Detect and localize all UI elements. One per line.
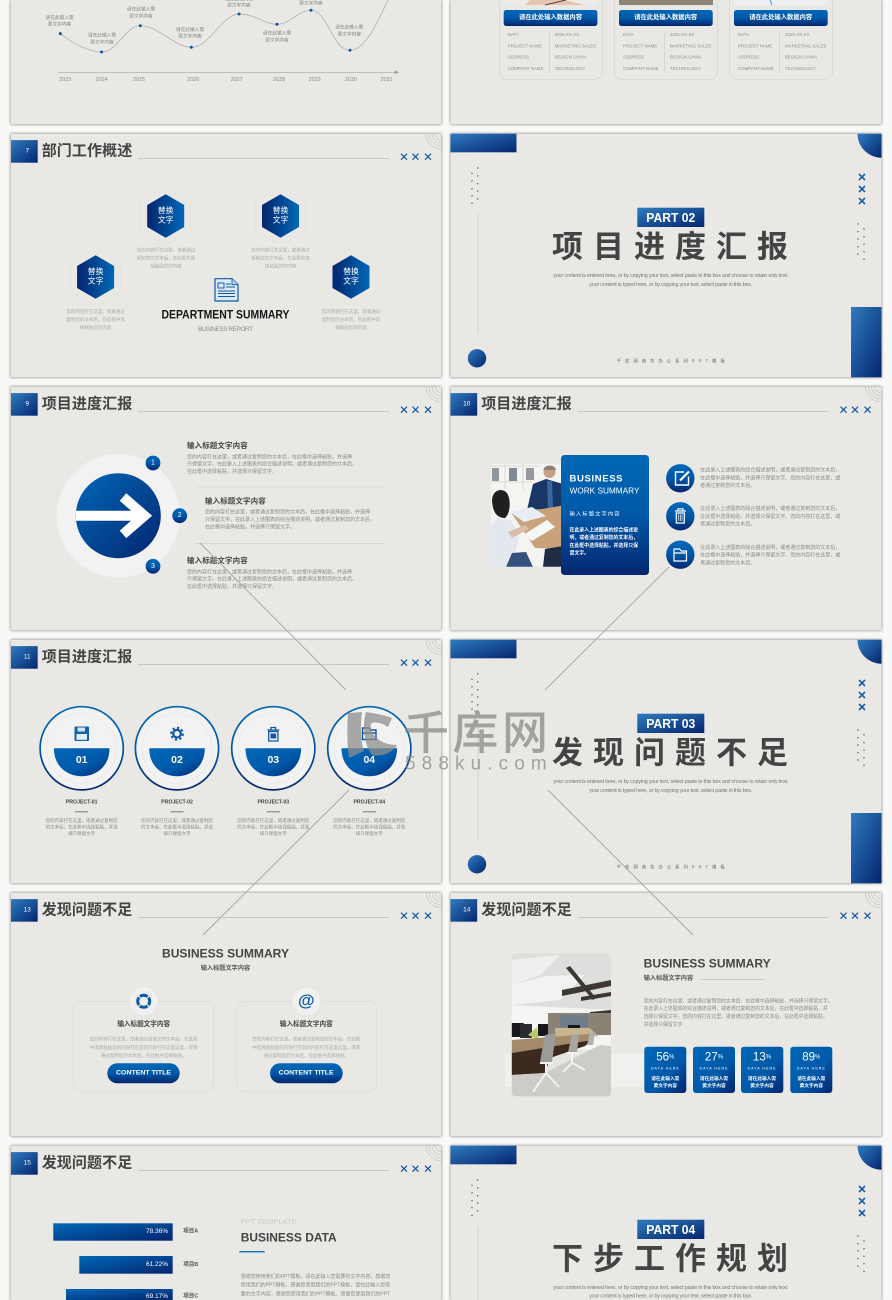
panel: slide 11 four projects <box>11 640 441 883</box>
card right: 您的内容打在这里。或者通过复制您的文本后。在此框 <box>252 1036 361 1042</box>
hexagon 1 text <box>137 246 196 270</box>
section description <box>553 1285 788 1299</box>
chart labels: 请在此输入需 <box>263 30 291 36</box>
text: item 3: 在此框中选择粘贴，并选择只保留文字。您的内容打在这里，或 <box>700 552 840 559</box>
hexagon 3 text <box>66 308 125 331</box>
hexagon 4: 文字 <box>343 276 359 286</box>
stat tile 56% <box>644 1047 686 1093</box>
heading <box>644 956 771 982</box>
axis years: 2031 <box>380 77 392 83</box>
card 2: TECHNOLOGY <box>670 66 701 71</box>
icon: trash <box>666 502 694 530</box>
part label: PART 04 <box>646 1222 696 1237</box>
hexagon 4 <box>326 248 376 306</box>
card 2: COMPANY NAME <box>623 66 659 71</box>
bar chart: 61.22% <box>146 1261 168 1268</box>
stat tile 89%: 要文字内容 <box>800 1082 823 1089</box>
text block 1: 输入标题文字内容 <box>187 440 248 450</box>
blue text panel: 在此框中选择粘贴，并选择只保 <box>570 542 638 549</box>
axis years: 2028 <box>273 77 285 83</box>
body text: 选择只保留文字。您的内容打在这里，或者通过复制您的文本后，在此框中选择粘贴， <box>644 1013 828 1020</box>
slide header: 7 <box>25 148 29 155</box>
decorative shapes <box>450 1146 882 1300</box>
heading: BUSINESS SUMMARY <box>162 946 289 960</box>
blue text panel: WORK SUMMARY <box>570 486 640 496</box>
body text: 要的文字内容，感谢您使用我们的PPT模板。感谢您使用我们的PPT <box>241 1291 390 1298</box>
slide header <box>11 893 441 922</box>
axis years: 2027 <box>231 77 243 83</box>
line chart curve <box>60 0 388 52</box>
body text <box>241 1273 390 1298</box>
stat tile 13%: 要文字内容 <box>750 1082 774 1089</box>
panel: slide 6 data cards <box>450 0 882 124</box>
badges <box>146 456 187 574</box>
hexagon 2 <box>256 187 306 245</box>
section description: your content is typed here, or by copying your text, select paste in this box. <box>589 282 752 288</box>
stat tile 56%: 请在此输入需 <box>651 1075 680 1082</box>
hexagon 3 <box>71 248 121 306</box>
panel: slide 7 department overview <box>11 134 441 377</box>
card 3: 请在此处输入数据内容 <box>749 12 813 21</box>
decorative shapes <box>450 640 882 883</box>
card left: CONTENT TITLE <box>116 1070 171 1076</box>
text block 3 <box>187 555 357 590</box>
slide header <box>11 1146 441 1175</box>
stat tile 56%: 56% <box>656 1051 675 1063</box>
heading: business data: BUSINESS DATA <box>241 1230 337 1244</box>
card right: @ <box>298 991 315 1010</box>
text: item 2: 在此录入上述图表的综合描述说明，或者通过复制您的文本后， <box>700 505 840 512</box>
text: item 1: 在此录入上述图表的综合描述说明，或者通过复制您的文本后， <box>700 467 840 474</box>
slide header <box>11 134 441 163</box>
panel: slide 12 section PART 03 <box>450 640 882 883</box>
stat tile 89%: 请在此输入需 <box>797 1075 826 1082</box>
card right: 通过复制您的文本后，在此框中选择粘贴。 <box>264 1052 349 1059</box>
stat tile 13%: DATA HERE <box>747 1067 777 1071</box>
photo: meeting <box>491 464 563 567</box>
blue text panel <box>561 455 649 575</box>
project 04: 04 <box>363 754 375 766</box>
card 2: PROJECT NAME <box>623 44 657 48</box>
project 01: 的文本后，在此框中选择粘贴，并选 <box>46 824 118 830</box>
slide header: 发现问题不足 <box>42 1153 132 1171</box>
axis years <box>59 77 392 83</box>
panel: slide 10 business work summary <box>450 387 882 630</box>
slide header: 13 <box>24 907 31 914</box>
axis years: 2023 <box>59 77 71 83</box>
project 04: 择只保留文字 <box>356 830 383 837</box>
text: item 2: 者通过复制您的文本后。 <box>700 521 755 528</box>
text: item 3: 在此录入上述图表的综合描述说明，或者通过复制您的文本后， <box>700 544 840 551</box>
text block 3: 您的内容打在这里，或者通过复制您的文本后，在此框中选择粘贴，并选择 <box>187 568 352 575</box>
project 01 <box>40 707 123 837</box>
card 1: BEIJIGN CHINA <box>555 54 587 60</box>
project 03: 03 <box>267 754 279 766</box>
project 02: 择只保留文字 <box>164 830 191 837</box>
card 2 <box>614 0 718 79</box>
card right: CONTENT TITLE <box>279 1070 334 1076</box>
section description <box>553 273 788 288</box>
hexagon 2 text <box>251 246 310 270</box>
card 3: 2025-XX-XX <box>785 32 809 37</box>
section description: your content is entered here, or by copying your text, select paste in this box and choose to retain only text. <box>553 1285 788 1291</box>
stat tile 56%: DATA HERE <box>651 1067 680 1071</box>
watermark: diagonal lines and logo: 千库网 <box>403 707 552 759</box>
chart labels: 请在此输入需 <box>88 32 116 38</box>
project 03: 的文本后，在此框中选择粘贴，并选 <box>237 824 310 830</box>
chart labels: 要文字内容 <box>338 30 361 38</box>
slide header: 9 <box>25 401 29 408</box>
decorative shapes <box>450 134 882 377</box>
chart labels: 要文字内容 <box>299 0 323 6</box>
text block 1: 您的内容打在这里，或者通过复制您的文本后，在此框中选择粘贴，并选择 <box>187 453 352 460</box>
bar chart: 项目B <box>183 1261 198 1268</box>
card 2: ADDRESS <box>623 54 644 60</box>
blue text panel: 留文字。 <box>570 550 589 556</box>
card left: 您的内容打在这里。或者通过复制您的文本后。在此框 <box>90 1036 198 1042</box>
text: PPT template: PPT TEMPLATE <box>241 1217 297 1226</box>
chart labels: 请在此输入需 <box>127 6 155 12</box>
panel: slide 5 timeline <box>11 0 441 124</box>
footer caption: 千库网商务办公系列PPT模板 <box>617 358 726 364</box>
project 03: 择只保留文字 <box>260 830 287 837</box>
body text: 您的内容打在这里，或者通过复制您的文本后，在此框中选择粘贴，并选择只保留文字。 <box>644 998 833 1004</box>
hexagon 4 text <box>322 308 381 331</box>
hexagon 3 text: 您的内容打在这里，或者通过 <box>66 308 125 315</box>
card 1: PROJECT NAME <box>508 44 542 48</box>
blue text panel: 在此录入上述图表的综合描述说 <box>570 526 638 534</box>
project 02 <box>135 707 219 837</box>
card left: 输入标题文字内容 <box>117 1019 170 1028</box>
card 1: 请在此处输入数据内容 <box>519 12 583 21</box>
slide header: 项目进度汇报 <box>42 395 132 413</box>
project 04: 的文本后，在此框中选择粘贴，并选 <box>333 824 406 830</box>
text block 2: 您的内容打在这里，或者通过复制您的文本后，在此框中选择粘贴，并选择 <box>205 509 370 516</box>
chart labels: 要文字内容 <box>227 2 251 8</box>
card 1: 2025-XX-XX <box>555 32 579 37</box>
card 1 <box>499 0 603 79</box>
hexagon 3: 替换 <box>88 266 104 276</box>
card left: 通过复制您的文本后，在此框中选择粘贴。 <box>101 1052 186 1059</box>
stat tile 89%: DATA HERE <box>797 1067 826 1071</box>
chart labels: 要文字内容 <box>48 20 72 28</box>
hexagon 2: 文字 <box>273 215 288 225</box>
card right <box>237 987 377 1091</box>
watermark: diagonal lines and logo <box>200 543 693 935</box>
card 3: TECHNOLOGY <box>785 66 816 71</box>
section title: 下步工作规划 <box>552 1241 798 1276</box>
hexagon 4 text: 择粘贴您的内容 <box>335 324 367 331</box>
project 01: PROJECT-01 <box>66 800 98 806</box>
chart labels: 要文字内容 <box>265 36 289 44</box>
hexagon 1 text: 复制您的文本后，在此框中选 <box>137 254 196 262</box>
slide header <box>450 893 880 922</box>
hexagon 2 text: 您的内容打在这里，或者通过 <box>251 246 310 254</box>
blue text panel: BUSINESS <box>570 474 622 484</box>
slide header: 发现问题不足 <box>42 901 132 919</box>
card left: 中选择粘贴您的内容打在您的内容打在这里这里。或者 <box>90 1044 198 1051</box>
light band <box>505 1054 745 1087</box>
axis years: 2026 <box>187 77 199 83</box>
card 2: DATA <box>623 32 634 37</box>
project 03 <box>232 707 315 837</box>
text block 1 <box>187 440 357 475</box>
slide header: 项目进度汇报 <box>42 648 132 666</box>
panel: slide 14 summary with stats <box>450 893 882 1136</box>
card 3: BEIJIGN CHINA <box>785 54 817 60</box>
card 3: COMPANY NAME <box>738 66 774 71</box>
slide header: 15 <box>24 1160 31 1167</box>
bar chart: 项目A <box>183 1227 198 1234</box>
card 2: 请在此处输入数据内容 <box>634 12 698 21</box>
chart labels: 请在此输入需 <box>335 24 364 30</box>
text block 2: 输入标题文字内容 <box>205 496 266 506</box>
card 3: PROJECT NAME <box>738 44 772 48</box>
hexagon 1 text: 您的内容打在这里，或者通过 <box>137 246 196 254</box>
stat tile 27%: DATA HERE <box>699 1067 729 1071</box>
watermark: diagonal lines and logo: 588ku.com <box>405 754 553 774</box>
card right: 中选择粘贴您的内容打在您的内容打在这里这里。或者 <box>252 1044 361 1051</box>
hexagon 4 text: 您的内容打在这里，或者通过 <box>322 308 381 315</box>
text block 3: 只保留文字。在此录入上述图表的综合描述说明，或者通过复制您的文本后， <box>187 576 357 583</box>
text block 2 <box>205 496 375 531</box>
part label: PART 03 <box>646 716 695 731</box>
stat tile 89% <box>790 1047 832 1093</box>
badges: 2 <box>178 512 182 519</box>
card 3: DATA <box>738 32 749 37</box>
hexagon 4: 替换 <box>343 266 359 276</box>
slide header <box>450 387 880 416</box>
project 01: 择只保留文字 <box>68 830 96 837</box>
hexagon 1 text: 择粘贴您的内容 <box>150 262 182 270</box>
project 03: 您的内容打在这里，或者通过复制您 <box>237 817 310 824</box>
card 1: MARKETING SALES <box>555 44 596 48</box>
body text: 在此录入上述图表的综合描述说明，或者通过复制您的文本后，在此框中选择粘贴，并 <box>644 1005 828 1012</box>
part label <box>637 1220 704 1239</box>
panel: slide 8 section PART 02 <box>450 134 882 377</box>
panel: slide 16 section PART 04 <box>450 1146 882 1300</box>
stat tile 13% <box>741 1047 783 1093</box>
bar chart <box>53 1223 198 1300</box>
card 3 <box>729 0 833 79</box>
stat tile 27%: 请在此输入需 <box>700 1075 728 1082</box>
stat tile 27%: 要文字内容 <box>702 1082 726 1089</box>
stat tile 27%: 27% <box>705 1051 724 1063</box>
card right: 输入标题文字内容 <box>280 1019 333 1028</box>
hexagon 3: 文字 <box>88 276 104 286</box>
project 02: PROJECT-02 <box>161 800 193 806</box>
section description <box>553 779 788 794</box>
section description: your content is typed here, or by copying your text, select paste in this box. <box>589 1293 752 1299</box>
chart labels: 要文字内容 <box>90 38 114 46</box>
hexagon 1 <box>141 187 191 245</box>
text block 3: 在此框中选择粘贴，并选择只保留文字。 <box>187 583 277 590</box>
body text <box>644 998 833 1028</box>
text: item 2 <box>700 505 840 528</box>
timeline axis <box>58 71 398 74</box>
slide header <box>11 640 441 669</box>
stat tile 13%: 13% <box>753 1051 772 1063</box>
card 1: DATA <box>508 32 519 37</box>
card 1: COMPANY NAME <box>508 66 543 71</box>
panel: slide 9 progress list <box>11 387 441 630</box>
chart labels: 要文字内容 <box>178 32 202 40</box>
project 04 <box>328 707 411 837</box>
stat tile 89%: 89% <box>802 1051 821 1063</box>
hexagon 2 text: 择粘贴您的内容 <box>265 262 297 270</box>
card 2: 2025-XX-XX <box>670 32 694 37</box>
project 04: 您的内容打在这里，或者通过复制您 <box>333 817 406 824</box>
photo: office <box>512 953 612 1097</box>
stat tile 13%: 请在此输入需 <box>748 1075 776 1082</box>
card 1: TECHNOLOGY <box>555 66 586 71</box>
chart labels: 请在此输入需 <box>45 14 74 21</box>
heading: BUSINESS SUMMARY <box>644 956 771 970</box>
stat tile 56%: 要文字内容 <box>654 1082 677 1089</box>
chart labels: 要文字内容 <box>129 12 153 20</box>
text: item 3 <box>700 544 840 567</box>
card 2: BEIJIGN CHINA <box>670 54 702 60</box>
accent line <box>239 1251 265 1252</box>
project 02: 的文本后，在此框中选择粘贴，并选 <box>141 824 213 830</box>
bar chart: 项目C <box>183 1292 198 1300</box>
card left <box>74 987 213 1091</box>
badges: 3 <box>151 563 155 570</box>
heading: department summary: DEPARTMENT SUMMARY <box>162 307 290 321</box>
axis years: 2030 <box>345 77 357 83</box>
blue text panel: 明，或者通过复制您的文本后， <box>570 534 638 541</box>
section description: your content is typed here, or by copying your text, select paste in this box. <box>589 788 752 794</box>
project 01: 您的内容打在这里，或者通过复制您 <box>46 817 118 824</box>
heading <box>162 946 289 972</box>
project 03: PROJECT-03 <box>257 800 289 806</box>
heading: 输入标题文字内容 <box>644 974 693 982</box>
hexagon 1: 替换 <box>158 205 174 215</box>
part label <box>637 208 704 227</box>
axis years: 2024 <box>96 77 108 83</box>
text: item 1: 在此框中选择粘贴，并选择只保留文字。您的内容打在这里，或 <box>700 474 840 481</box>
body text: 感谢您使用我们的PPT模板，请在此输入您需要的文字内容，感谢您 <box>241 1273 390 1280</box>
footer caption: 千库网商务办公系列PPT模板 <box>617 864 726 871</box>
badges: 1 <box>151 460 155 466</box>
icon: document <box>215 279 238 301</box>
text: item 1 <box>700 467 840 489</box>
text block 1: 只保留文字。在此录入上述图表的综合描述说明，或者通过复制您的文本后， <box>187 461 357 468</box>
section title: 发现问题不足 <box>552 736 798 771</box>
subheading: business report: BUSINESS REPORT <box>198 326 253 333</box>
project 01: 01 <box>76 754 88 766</box>
hexagon 3 text: 复制您的文本后，在此框中选 <box>66 316 125 323</box>
axis years: 2029 <box>309 77 321 83</box>
project 04: PROJECT-04 <box>353 800 385 806</box>
chart labels <box>45 0 364 46</box>
stat tile 27% <box>693 1047 735 1093</box>
arrow circle graphic <box>57 454 180 577</box>
slide header: 发现问题不足 <box>481 901 572 919</box>
slide header: 10 <box>463 401 471 408</box>
hexagon 3 text: 择粘贴您的内容 <box>80 324 112 331</box>
slide header: 11 <box>24 654 31 661</box>
section description: your content is entered here, or by copying your text, select paste in this box and choose to retain only text. <box>553 273 788 279</box>
slide header: 项目进度汇报 <box>481 395 572 413</box>
text: item 2: 在此框中选择粘贴，并选择只保留文字。您的内容打在这里，或 <box>700 513 840 520</box>
chart data points <box>59 9 352 54</box>
hexagon 2: 替换 <box>273 205 288 215</box>
text: item 1: 者通过复制您的文本后。 <box>700 482 755 489</box>
icon: folder <box>666 540 694 569</box>
project 02: 02 <box>171 754 183 766</box>
project 02: 您的内容打在这里，或者通过复制您 <box>141 817 213 824</box>
part label: PART 02 <box>646 210 695 225</box>
hexagon 4 text: 复制您的文本后，在此框中选 <box>322 316 381 323</box>
body text: 使用我们的PPT模板。感谢您使用我们的PPT模板，请在此输入您需 <box>241 1282 390 1289</box>
body text: 并选择只保留文字 <box>644 1021 683 1028</box>
hexagon 1: 文字 <box>158 215 174 225</box>
text: item 3: 者通过复制您的文本后。 <box>700 560 755 567</box>
card 1: ADDRESS <box>508 54 529 60</box>
blue text panel: 输入标题文字内容 <box>570 509 621 517</box>
card 3: MARKETING SALES <box>785 44 827 48</box>
heading: 输入标题文字内容 <box>201 964 250 972</box>
text block 2: 在此框中选择粘贴，并选择只保留文字。 <box>205 524 295 531</box>
section description: your content is entered here, or by copying your text, select paste in this box and choose to retain only text. <box>553 779 788 785</box>
chart labels: 请在此输入需 <box>176 26 204 33</box>
slide header: 14 <box>463 907 471 914</box>
text block 1: 在此框中选择粘贴，并选择只保留文字。 <box>187 468 277 475</box>
axis years: 2025 <box>133 77 145 83</box>
part label <box>637 714 704 733</box>
text block 2: 只保留文字。在此录入上述图表的综合描述说明，或者通过复制您的文本后， <box>205 516 375 523</box>
bar chart: 69.17% <box>146 1293 168 1300</box>
card 2: MARKETING SALES <box>670 44 711 48</box>
panel: slide 15 business data <box>11 1146 441 1300</box>
slide header <box>11 387 441 416</box>
icon: edit <box>666 464 694 492</box>
section title: 项目进度汇报 <box>552 230 798 264</box>
panel: slide 13 business summary cards <box>11 893 441 1136</box>
hexagon 2 text: 复制您的文本后，在此框中选 <box>251 254 310 262</box>
bar chart: 78.36% <box>146 1228 168 1235</box>
card 3: ADDRESS <box>738 54 759 60</box>
text block 3: 输入标题文字内容 <box>187 555 248 565</box>
slide header: 部门工作概述 <box>42 141 132 159</box>
